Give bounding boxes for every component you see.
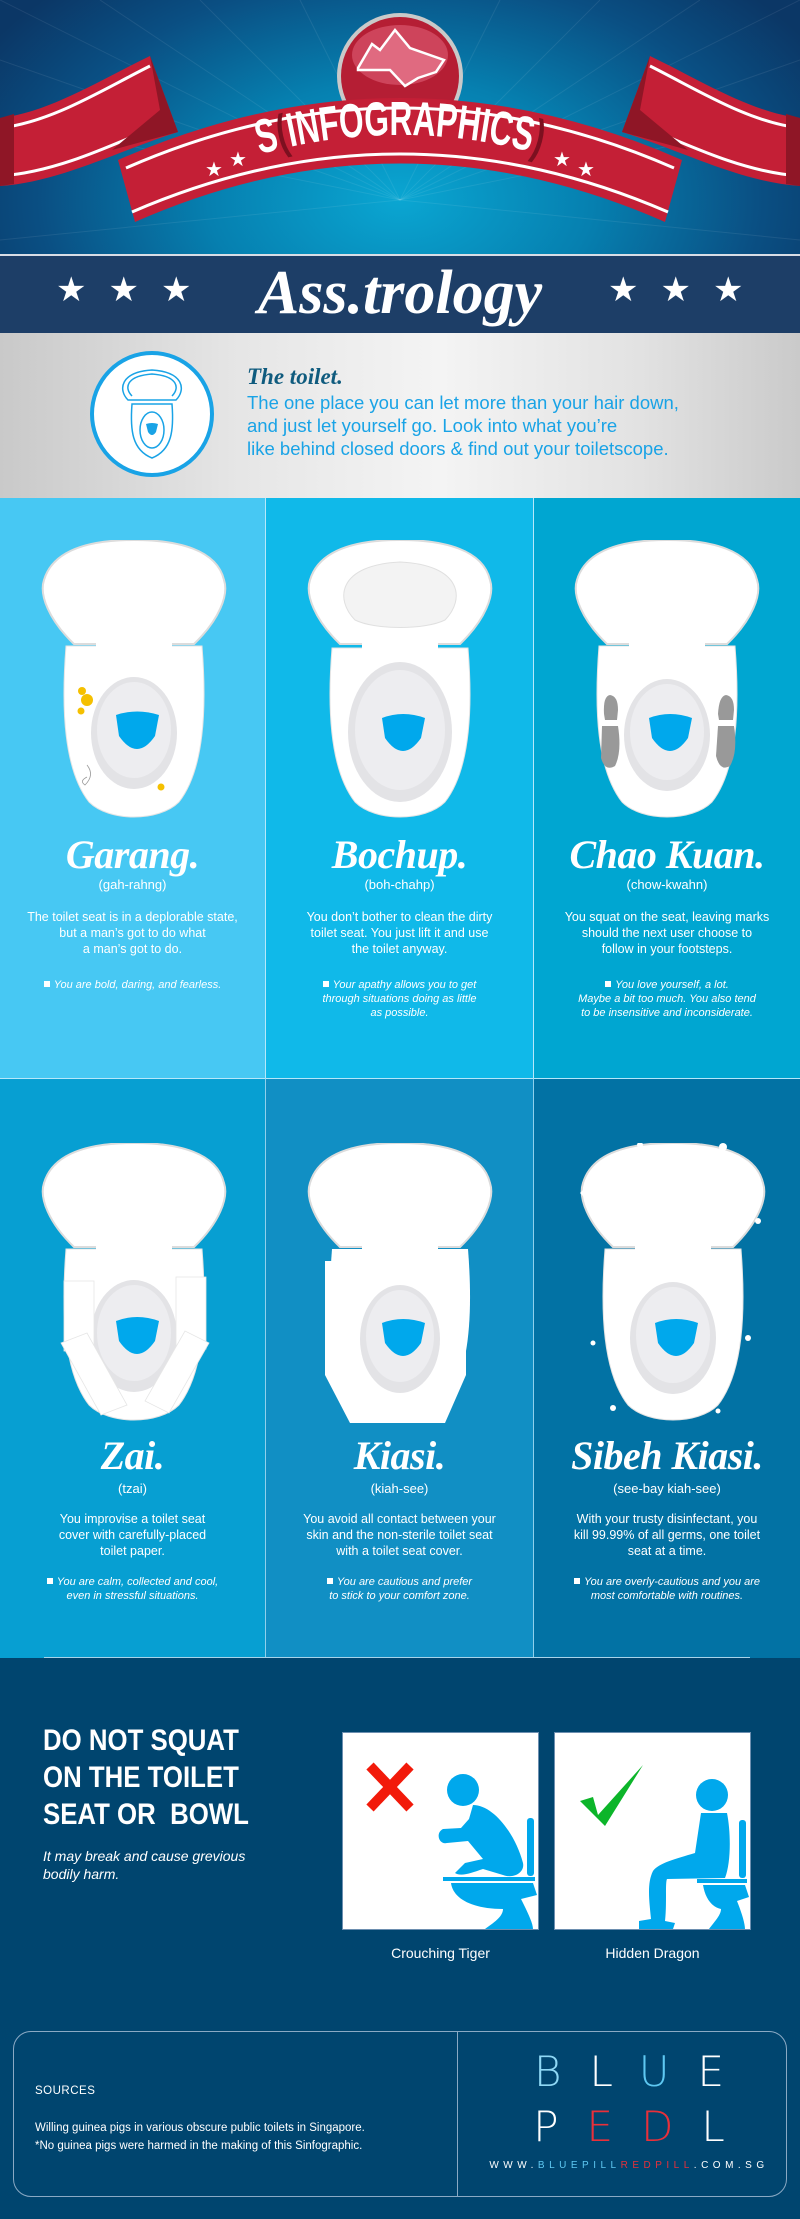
bullet (578, 979, 756, 1019)
sources: Willing guinea pigs in various obscure public toilets in Singapore. (35, 2122, 365, 2134)
description: skin and the non-sterile toilet seat (306, 1528, 493, 1542)
name: Kiasi. (354, 1433, 445, 1478)
description: but a man’s got to do what (59, 926, 206, 940)
logo: blue pill red pill: BLUE (534, 2047, 752, 2096)
warning subtext: It may break and cause grevious (43, 1848, 245, 1864)
stars right: ★★★ (608, 270, 765, 310)
icon: sparkling toilet (580, 1143, 766, 1420)
pronunciation: (chow-kwahn) (627, 877, 707, 892)
icon: red X (370, 1766, 410, 1808)
description: cover with carefully-placed (59, 1528, 206, 1542)
panel: Sibeh Kiasi (534, 1078, 800, 1658)
bullet: as possible. (370, 1007, 429, 1019)
sources: SOURCES (35, 2085, 95, 2097)
bullet: You are bold, daring, and fearless. (54, 979, 221, 991)
icon: toilet paper seat (42, 1143, 226, 1420)
description (574, 1512, 760, 1558)
header banner (0, 0, 800, 254)
ribbon main band: S(INFOGRAPHICS) (255, 102, 544, 162)
bullet: even in stressful situations. (66, 1590, 199, 1602)
bullet: to stick to your comfort zone. (329, 1590, 470, 1602)
panel: Zai (0, 1078, 266, 1658)
description: the toilet anyway. (352, 942, 447, 956)
description: should the next user choose to (582, 926, 752, 940)
intro text: The one place you can let more than your hair down, (247, 392, 679, 413)
pronunciation: (kiah-see) (371, 1481, 428, 1496)
description: You improvise a toilet seat (60, 1512, 205, 1526)
description (59, 1512, 206, 1558)
badge: red circle with map (337, 13, 463, 139)
bullet (47, 1576, 218, 1602)
ribbon main band: ★ (553, 147, 571, 171)
icon: footprint toilet (574, 540, 760, 818)
icon: toilet in circle (90, 351, 214, 477)
title bar (0, 254, 800, 333)
description: You squat on the seat, leaving marks (565, 910, 769, 924)
logo: blue pill red pill: WWW.BLUEPILLREDPILL.COM.SG (489, 2160, 769, 2171)
icon: lid lifted toilet (308, 540, 492, 818)
description: kill 99.99% of all germs, one toilet (574, 1528, 760, 1542)
pronunciation: (gah-rahng) (99, 877, 166, 892)
warning heading: ON THE TOILET (43, 1761, 239, 1794)
ribbon right tail (622, 56, 800, 186)
description (303, 1512, 496, 1558)
ribbon main band: ★ (205, 157, 223, 181)
caption: crouching tiger: Crouching Tiger (391, 1945, 490, 1961)
panel: Garang (0, 498, 266, 1078)
warning subtext: bodily harm. (43, 1866, 119, 1882)
description: You avoid all contact between your (303, 1512, 496, 1526)
intro panel (0, 333, 800, 498)
ribbon left tail (0, 56, 178, 186)
logo: blue pill red pill: PEDL (533, 2102, 753, 2151)
ribbon main band (118, 98, 682, 222)
bullet: You love yourself, a lot. (615, 979, 729, 991)
panel: Bochup (266, 498, 534, 1078)
description: with a toilet seat cover. (336, 1544, 463, 1558)
icon: green check (580, 1765, 643, 1826)
bullet: You are cautious and prefer (337, 1576, 472, 1588)
bullet: Your apathy allows you to get (333, 979, 476, 991)
intro text: and just let yourself go. Look into what you’re (247, 415, 617, 436)
bullet: Maybe a bit too much. You also tend (578, 993, 756, 1005)
intro text: like behind closed doors & find out your toiletscope. (247, 438, 669, 459)
warning heading: DO NOT SQUAT (43, 1724, 239, 1757)
description: follow in your footsteps. (602, 942, 732, 956)
ribbon main band: ★ (229, 147, 247, 171)
icon: dirty toilet (42, 540, 226, 818)
description: a man’s got to do. (83, 942, 182, 956)
panel: Chao Kuan (534, 498, 800, 1078)
intro text (247, 364, 679, 459)
sources: *No guinea pigs were harmed in the making of this Sinfographic. (35, 2140, 362, 2152)
description: toilet seat. You just lift it and use (311, 926, 488, 940)
title text: Ass.trology (258, 259, 542, 327)
bullet (327, 1576, 472, 1602)
description (306, 910, 492, 956)
footer box (13, 2031, 787, 2197)
description: With your trusty disinfectant, you (577, 1512, 757, 1526)
pronunciation: (see-bay kiah-see) (613, 1481, 721, 1496)
name: Chao Kuan. (569, 832, 765, 877)
description (27, 910, 238, 956)
pronunciation: (boh-chahp) (364, 877, 435, 892)
description: seat at a time. (628, 1544, 706, 1558)
panel: sitting (correct) (554, 1732, 751, 1930)
icon: seat cover toilet (308, 1143, 492, 1423)
panel: crouching (wrong) (342, 1732, 539, 1930)
bullet: to be insensitive and inconsiderate. (581, 1007, 753, 1019)
bullet (322, 979, 477, 1019)
bullet (574, 1576, 760, 1602)
name: Sibeh Kiasi. (571, 1433, 763, 1478)
pronunciation: (tzai) (118, 1481, 147, 1496)
stars left: ★★★ (56, 270, 213, 310)
bullet: most comfortable with routines. (591, 1590, 743, 1602)
warning subtext (43, 1848, 246, 1882)
warning heading: SEAT OR BOWL (43, 1798, 249, 1831)
logo: blue pill red pill (489, 2047, 769, 2171)
description (565, 910, 769, 956)
name: Zai. (101, 1433, 164, 1478)
sources (35, 2085, 365, 2152)
description: The toilet seat is in a deplorable state, (27, 910, 238, 924)
description: toilet paper. (100, 1544, 165, 1558)
bullet: through situations doing as little (322, 993, 477, 1005)
caption: hidden dragon: Hidden Dragon (605, 1945, 700, 1961)
name: Garang. (66, 832, 199, 877)
intro text: The toilet. (247, 364, 343, 389)
warning heading (43, 1724, 249, 1831)
bullet: You are calm, collected and cool, (57, 1576, 218, 1588)
ribbon main band: ★ (577, 157, 595, 181)
name: Bochup. (332, 832, 467, 877)
panel: Kiasi (266, 1078, 534, 1658)
description: You don’t bother to clean the dirty (307, 910, 492, 924)
bullet: You are overly-cautious and you are (584, 1576, 760, 1588)
